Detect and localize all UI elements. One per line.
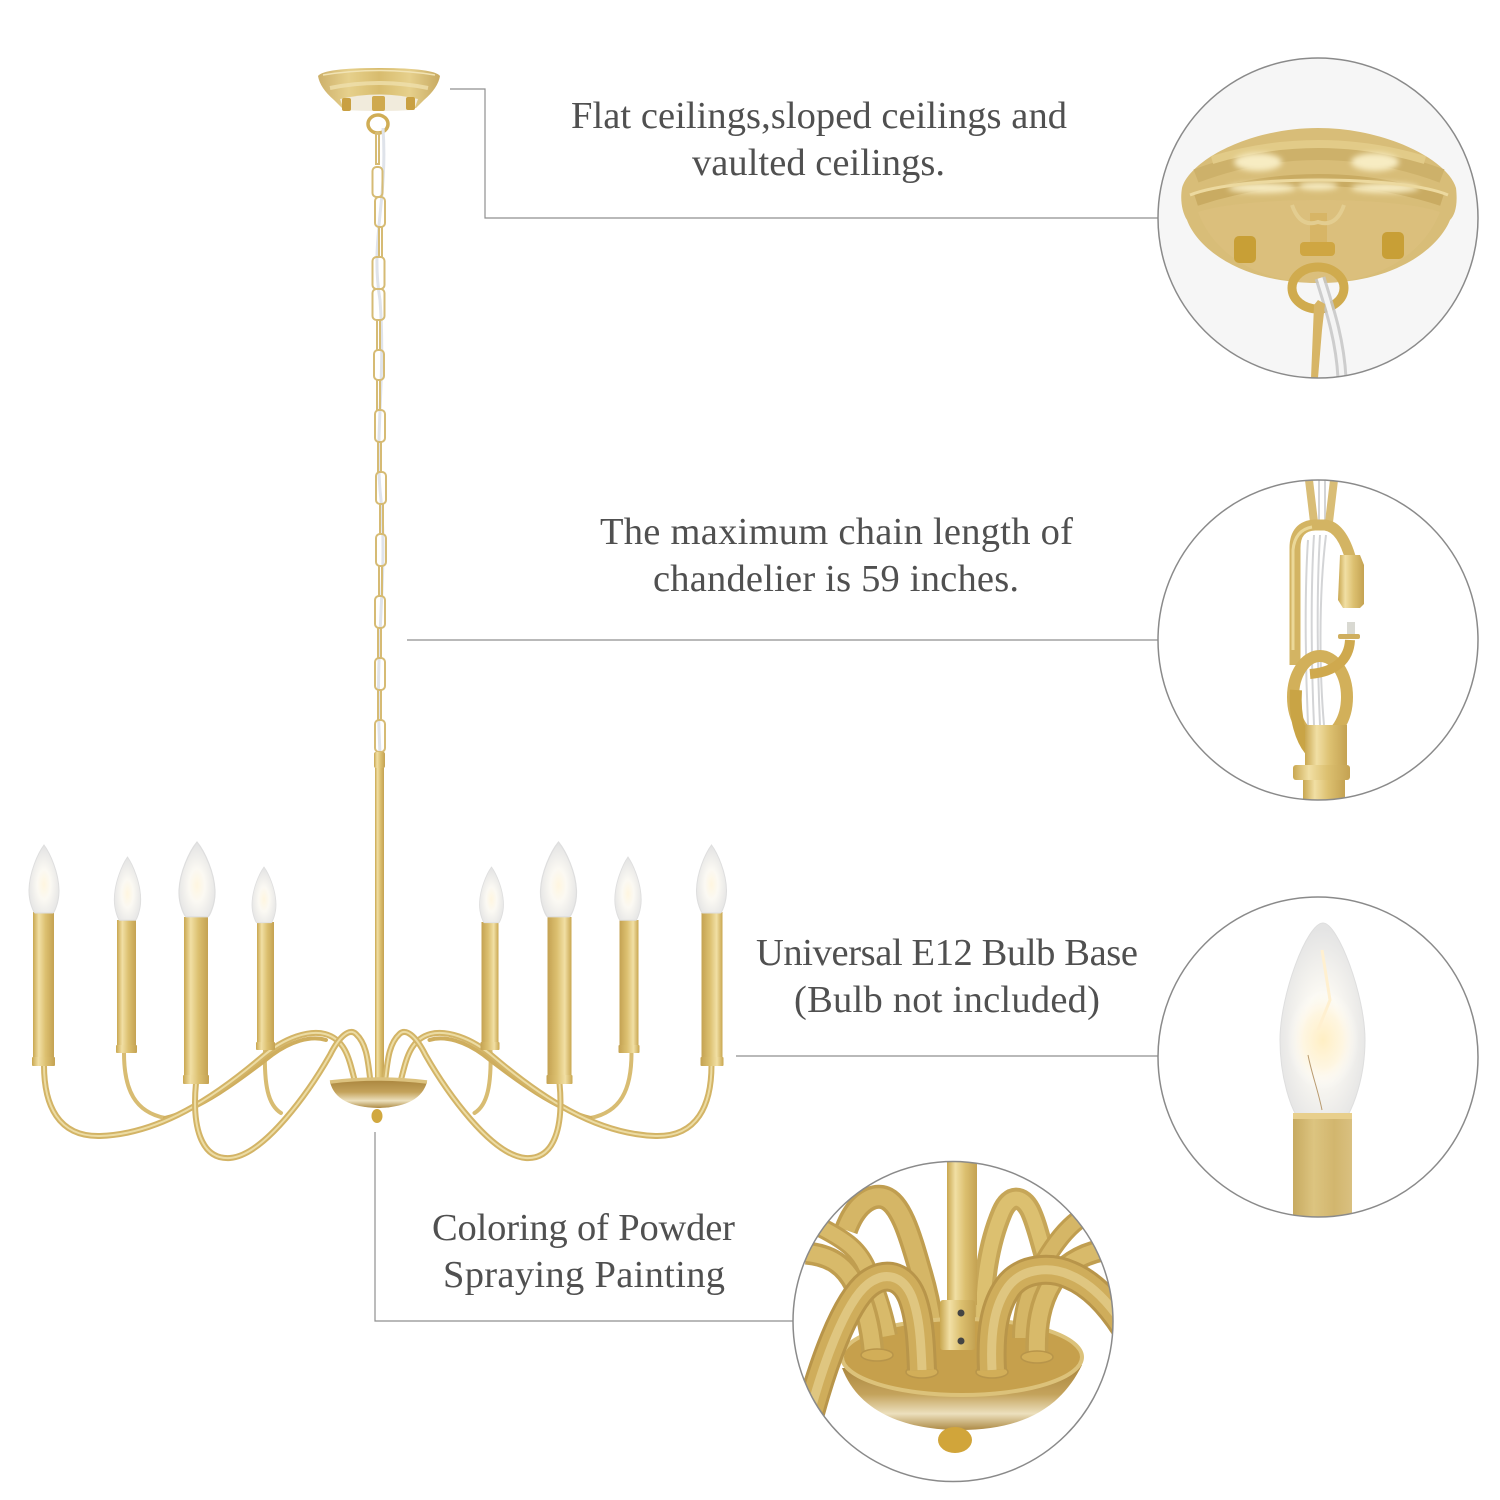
caption: ceilings: Flat ceilings,sloped ceilings and: [571, 95, 1067, 137]
back small arms: [124, 1050, 281, 1118]
detail circle: chain link: [1158, 480, 1478, 802]
chandelier product photo: [29, 68, 726, 1158]
mounting studs and neck: [1234, 236, 1256, 263]
rear arches: [846, 1197, 1046, 1325]
lower ring: [1293, 656, 1347, 738]
left half arms and candles: [29, 842, 371, 1158]
hub plate: [842, 1319, 1082, 1395]
coupler: [940, 1300, 975, 1350]
canopy dome: [1181, 128, 1457, 283]
right half arms and candles: [384, 842, 726, 1158]
caption: chain length: [600, 511, 1073, 600]
ceiling plate: [1308, 282, 1328, 283]
center rod: [947, 1160, 977, 1305]
caption: powder coating: Coloring of Powder: [432, 1207, 735, 1249]
detail circle: bulb: [1158, 897, 1478, 1217]
chain and cord: [372, 128, 386, 755]
candle sleeve: [1293, 1113, 1352, 1217]
caption: bulb base: Universal E12 Bulb Base: [756, 932, 1138, 974]
dome highlights: [1228, 153, 1419, 193]
front arches: [806, 1270, 1130, 1428]
caption: powder coating: [432, 1207, 735, 1296]
detail circle: canopy: [1158, 58, 1478, 378]
leader lines: [375, 89, 1158, 1321]
glass bulb: [1280, 923, 1365, 1115]
central bowl: [330, 1079, 427, 1123]
candle sleeves: [32, 912, 275, 1084]
hook thread and flange: [1347, 622, 1355, 634]
side arms: [806, 1220, 1102, 1355]
loop ring: [1292, 267, 1344, 309]
caption: powder coating: Spraying Painting: [443, 1254, 725, 1296]
caption: bulb base: (Bulb not included): [794, 979, 1100, 1021]
arm sockets: [861, 1349, 1053, 1378]
cord wires: [1306, 480, 1326, 725]
swivel body: [1305, 725, 1347, 767]
front deep arm: [195, 1032, 371, 1158]
caption: chain length: The maximum chain length of: [600, 511, 1073, 553]
hub bowl: [842, 1365, 1082, 1430]
detail circle: powder coated hub: [793, 1160, 1130, 1482]
screw collar: [1338, 555, 1364, 608]
chain link and cord: [1320, 278, 1342, 378]
finial: [938, 1427, 972, 1453]
caption: bulb base: [756, 932, 1138, 1021]
center rod: [374, 752, 385, 1082]
caption: chain length: chandelier is 59 inches.: [653, 558, 1019, 600]
caption: ceilings: [571, 95, 1067, 184]
ceiling canopy: [318, 68, 440, 133]
caption: ceilings: vaulted ceilings.: [692, 142, 945, 184]
upper link: [1309, 480, 1334, 522]
bulbs: [29, 842, 276, 923]
carabiner link: [1295, 525, 1351, 665]
long outer arm: [44, 1033, 356, 1136]
filament glow: [1300, 1010, 1346, 1072]
